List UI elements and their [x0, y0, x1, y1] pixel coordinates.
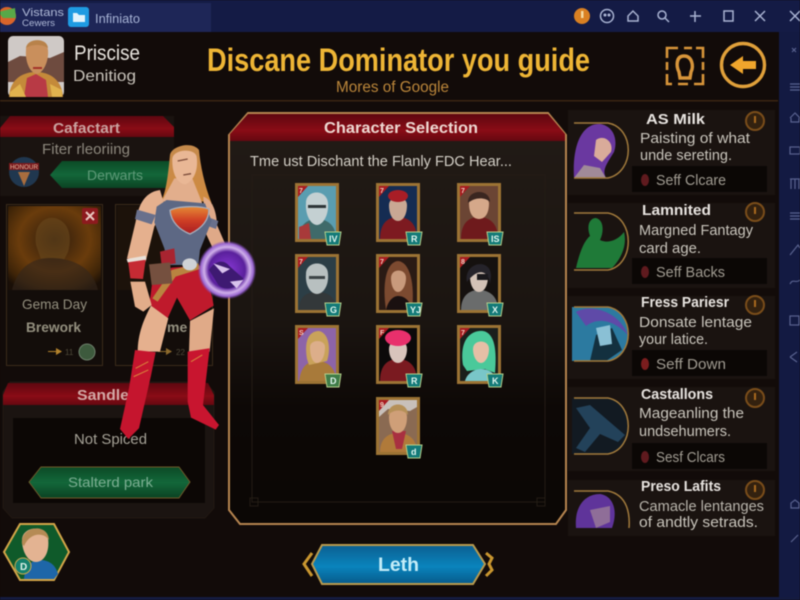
card: pale warrior: 7: [299, 188, 303, 195]
subtitle: Mores of Google: [336, 79, 449, 96]
instruction text: Tme ust Dischant the Flanly FDC Hear...: [250, 153, 512, 170]
card: blonde on purple: S: [299, 330, 304, 337]
bottom edge: [0, 597, 800, 600]
wristband: [128, 258, 146, 279]
icon: back arrow: [722, 44, 764, 86]
panel: filter: [0, 116, 174, 196]
icon: info: [746, 481, 764, 499]
top window bar: [0, 0, 800, 32]
start button: Stalterd park: [68, 474, 154, 490]
heading: Sandle: Sandle: [77, 387, 129, 404]
badge: IV: [329, 234, 338, 244]
tag: Seff Down: [656, 357, 726, 373]
badge: d: [411, 447, 416, 457]
heading: filter: Cafactart: [53, 121, 120, 137]
badge: D: [330, 376, 337, 386]
text: of andtly setrads.: [639, 515, 758, 531]
filter button: Derwarts: [87, 167, 143, 183]
card: pink-haired fighter: F: [380, 330, 385, 337]
badge: R: [411, 376, 418, 386]
text: Fress Pariesr: [641, 294, 729, 311]
text: Paisting of what: [640, 131, 750, 147]
app name: Vistans: [22, 7, 65, 19]
card: eyepatch fighter: [457, 254, 503, 316]
hair: [162, 145, 212, 203]
heart emblem: [170, 207, 209, 234]
text: card age.: [639, 241, 701, 257]
face: [172, 151, 197, 184]
badge: IS: [491, 234, 500, 244]
card stats: [48, 344, 95, 360]
app name: Cewers: [22, 18, 56, 28]
card: brown-haired youth: 7: [461, 188, 465, 195]
tag: Seff Clcare: [656, 173, 726, 189]
card: eyepatch fighter: 8: [461, 259, 465, 266]
card: pink-haired fighter: [376, 325, 422, 387]
profile name: [73, 42, 140, 85]
buckle: [182, 258, 197, 270]
text: Donsate lentage: [639, 315, 752, 331]
text: Preso Lafits: [641, 478, 721, 495]
inner frame: [250, 175, 545, 506]
avatar: [572, 307, 628, 361]
text: [639, 478, 764, 531]
card stats: 11: [65, 348, 74, 357]
text: Lamnited: [642, 202, 711, 219]
heading: character selection: Character Selection: [324, 120, 478, 137]
list item: Preso Lafits: [572, 478, 764, 531]
icon: app logo: [0, 7, 16, 25]
icon: info: [746, 296, 764, 314]
card: green-haired woman: 7: [461, 330, 465, 337]
text: unde sereting.: [640, 148, 732, 164]
icon: info: [746, 112, 764, 130]
status text: Not Spiced: [74, 432, 147, 448]
tag: Seff Backs: [656, 265, 725, 281]
icon: info: [746, 203, 764, 221]
armbands: [135, 210, 156, 224]
text: AS Milk: [646, 111, 706, 128]
text: Castallons: [641, 386, 713, 403]
ornaments: [304, 553, 492, 576]
text: Mageanling the: [639, 406, 744, 422]
tag: [632, 166, 767, 192]
tab title: Infiniato: [95, 11, 140, 26]
profile name: Priscise: [74, 42, 140, 65]
filter label: Fiter rleoriing: [42, 142, 130, 158]
avatar: user hexagon: [4, 524, 69, 580]
text: Margned Fantagy: [639, 223, 754, 239]
card stats: [158, 348, 185, 357]
character: hero with orb: [120, 145, 256, 439]
card: red hat elder: 7: [380, 188, 384, 195]
icon: info: [746, 389, 764, 407]
card art: [12, 218, 98, 290]
badge: R: [411, 234, 418, 244]
badge: X: [492, 305, 498, 315]
badge: K: [492, 376, 499, 386]
avatar: user hexagon: D: [20, 562, 27, 573]
hand: [130, 282, 152, 312]
icon: blue folder: [68, 7, 89, 27]
card: grey warrior: [295, 254, 341, 316]
card text: Gema Day: [22, 296, 87, 312]
list item: Lamnited: [572, 202, 767, 284]
header divider: [0, 100, 778, 102]
card text: [22, 296, 87, 335]
text: Camacle lentanges: [639, 499, 764, 515]
tag: Sesf Clcars: [656, 450, 725, 466]
card: blonde on purple: [295, 325, 341, 387]
card: long-haired woman: [376, 254, 422, 316]
tag: [632, 443, 767, 469]
card: grey warrior: 7: [299, 259, 303, 266]
tag: [632, 350, 767, 376]
card: hidden second card: [116, 204, 212, 366]
icon: badge: [9, 157, 39, 187]
text: [639, 386, 744, 440]
icon: close: [82, 208, 98, 224]
card: blond man: 9: [380, 402, 384, 409]
card: green-haired woman: [457, 325, 503, 387]
start button: [29, 467, 190, 498]
text: undsehumers.: [639, 424, 731, 440]
text: [639, 202, 754, 257]
right arm: [203, 197, 225, 252]
text: [640, 111, 750, 164]
filter button: [50, 161, 172, 188]
boots: [120, 350, 156, 439]
window controls: [574, 8, 800, 24]
card: red hat elder: [376, 183, 422, 245]
badge: YJ: [410, 305, 421, 315]
heading: Sandle: [3, 383, 214, 405]
orb: [198, 241, 256, 299]
app name: [22, 7, 65, 28]
card stats: 22: [176, 348, 185, 357]
card: pale warrior: [295, 183, 341, 245]
torso: [154, 200, 212, 265]
card: brown-haired youth: [457, 183, 503, 245]
panel: Sandle: [3, 382, 214, 518]
badge: G: [330, 305, 337, 315]
list item: Castallons: [572, 386, 767, 469]
card: Gema Day: [6, 204, 102, 366]
thighs: [138, 306, 168, 352]
icon: badge: HONOUR: [10, 164, 38, 171]
avatar: [572, 398, 628, 454]
icon: target frame: [667, 48, 703, 84]
heading: filter: [0, 116, 174, 137]
text: your latice.: [639, 332, 708, 348]
title: Discane Dominator you guide: [207, 42, 590, 78]
list item: Fress Pariesr: [572, 294, 767, 376]
shorts: [149, 266, 214, 320]
belt pouch: [160, 248, 176, 266]
profile name: Denitiog: [73, 68, 136, 85]
list row backgrounds: [568, 110, 775, 536]
heading: character selection: [230, 114, 565, 141]
text: [639, 294, 752, 348]
card text: Brework: [26, 319, 81, 335]
avatar: [572, 491, 629, 528]
inner panel: [13, 418, 205, 503]
left arm: [127, 190, 165, 262]
panel: character selection: [229, 113, 566, 524]
avatar: [572, 123, 628, 178]
button: Leth: Leth: [378, 555, 419, 576]
list item: AS Milk: [572, 111, 767, 192]
profile portrait: [8, 36, 64, 97]
tag: [632, 258, 767, 284]
card: blond man: [376, 397, 422, 458]
belt: [152, 263, 200, 302]
avatar: [572, 213, 628, 270]
neck and chest: [162, 178, 202, 203]
right navigation sidebar: [779, 32, 800, 600]
card text: me: [167, 319, 187, 335]
button: Leth: [304, 545, 492, 584]
card: long-haired woman: 7: [380, 259, 384, 266]
sidebar icons: [790, 48, 800, 542]
